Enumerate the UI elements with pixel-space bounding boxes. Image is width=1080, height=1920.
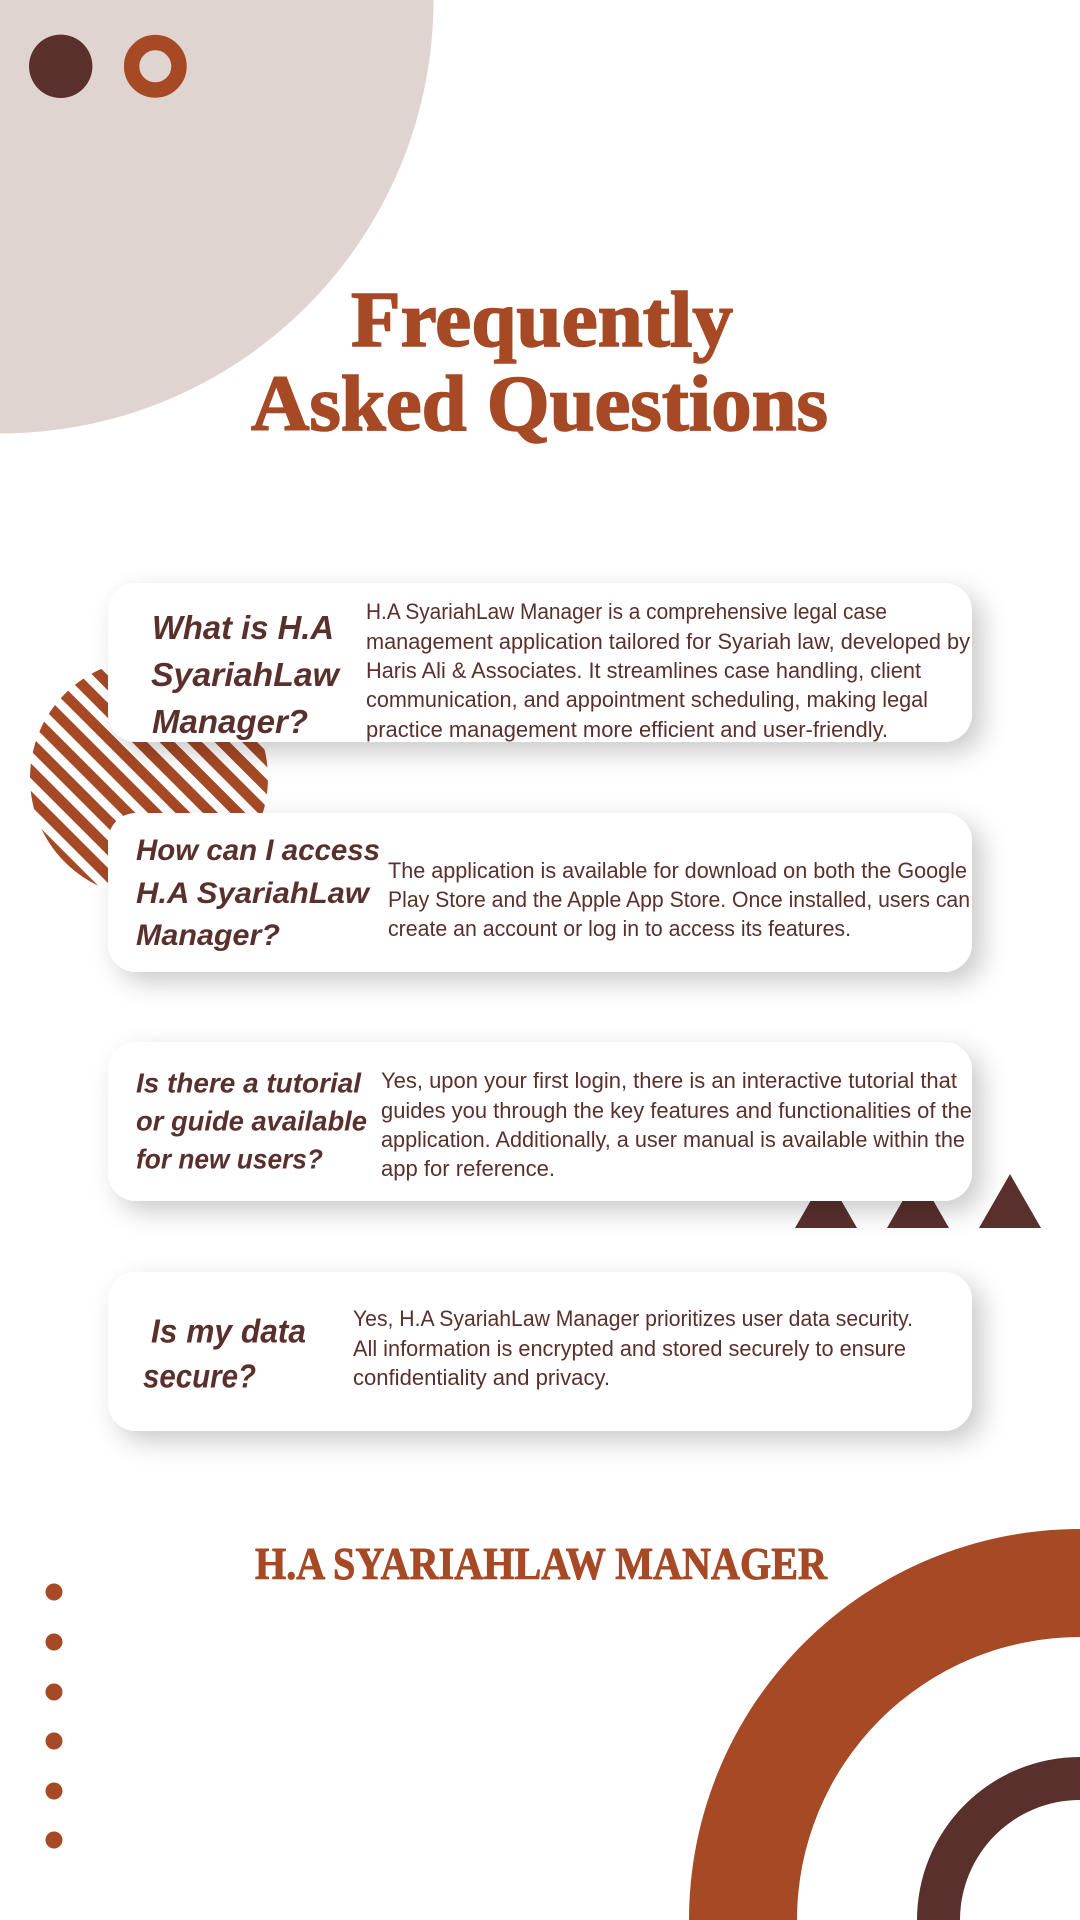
answer: management application tailored for Syariah law, developed by — [366, 629, 970, 654]
question — [136, 1068, 367, 1174]
title: Asked Questions — [251, 361, 828, 448]
decorative quarter circle top-left — [0, 0, 434, 434]
answer: All information is encrypted and stored securely to ensure — [353, 1336, 906, 1361]
question: Is there a tutorial — [136, 1068, 362, 1098]
card background — [108, 813, 972, 972]
question: Manager? — [152, 703, 308, 740]
question — [143, 1312, 306, 1394]
answer: create an account or log in to access its features. — [388, 916, 851, 941]
question: Manager? — [136, 919, 280, 952]
small dark arc — [917, 1757, 1080, 1920]
card background — [108, 1272, 972, 1431]
question: secure? — [143, 1358, 256, 1394]
question — [151, 609, 341, 740]
answer — [381, 1068, 972, 1181]
answer: H.A SyariahLaw Manager is a comprehensive legal case — [366, 599, 887, 624]
answer: guides you through the key features and functionalities of the — [381, 1098, 972, 1123]
title — [251, 277, 828, 448]
question: Is my data — [151, 1312, 306, 1350]
question: How can I access — [136, 834, 380, 867]
panel: tutorial — [108, 1042, 972, 1201]
answer — [353, 1306, 913, 1390]
icon: ring — [132, 43, 179, 90]
question: H.A SyariahLaw — [136, 877, 371, 910]
answer — [388, 858, 970, 941]
panel: how to access — [108, 813, 972, 972]
answer: practice management more efficient and user-friendly. — [366, 717, 888, 742]
card background — [108, 1042, 972, 1201]
answer: confidentiality and privacy. — [353, 1365, 610, 1390]
triangles decoration — [795, 1174, 1041, 1228]
answer: Haris Ali & Associates. It streamlines case handling, client — [366, 658, 921, 683]
question: What is H.A — [152, 609, 334, 646]
question: for new users? — [136, 1144, 323, 1174]
answer: Yes, H.A SyariahLaw Manager prioritizes user data security. — [353, 1306, 913, 1331]
question — [136, 834, 380, 952]
large rust arc — [689, 1529, 1080, 1920]
answer — [366, 599, 970, 742]
answer: The application is available for download on both the Google — [388, 858, 967, 883]
footer brand name: H.A SYARIAHLAW MANAGER — [255, 1539, 827, 1589]
question: SyariahLaw — [151, 656, 341, 693]
dotted column decoration — [46, 1584, 62, 1848]
answer: app for reference. — [381, 1156, 555, 1181]
answer: Yes, upon your first login, there is an interactive tutorial that — [381, 1068, 957, 1093]
answer: application. Additionally, a user manual is available within the — [381, 1127, 965, 1152]
panel: data security — [108, 1272, 972, 1431]
answer: communication, and appointment scheduling, making legal — [366, 687, 928, 712]
card background — [108, 583, 972, 742]
panel: what is the app — [108, 583, 972, 742]
question: or guide available — [136, 1106, 367, 1136]
answer: Play Store and the Apple App Store. Once installed, users can — [388, 887, 970, 912]
striped circle decoration — [30, 668, 268, 886]
icon: dark circle — [29, 35, 92, 98]
title: Frequently — [351, 277, 733, 364]
